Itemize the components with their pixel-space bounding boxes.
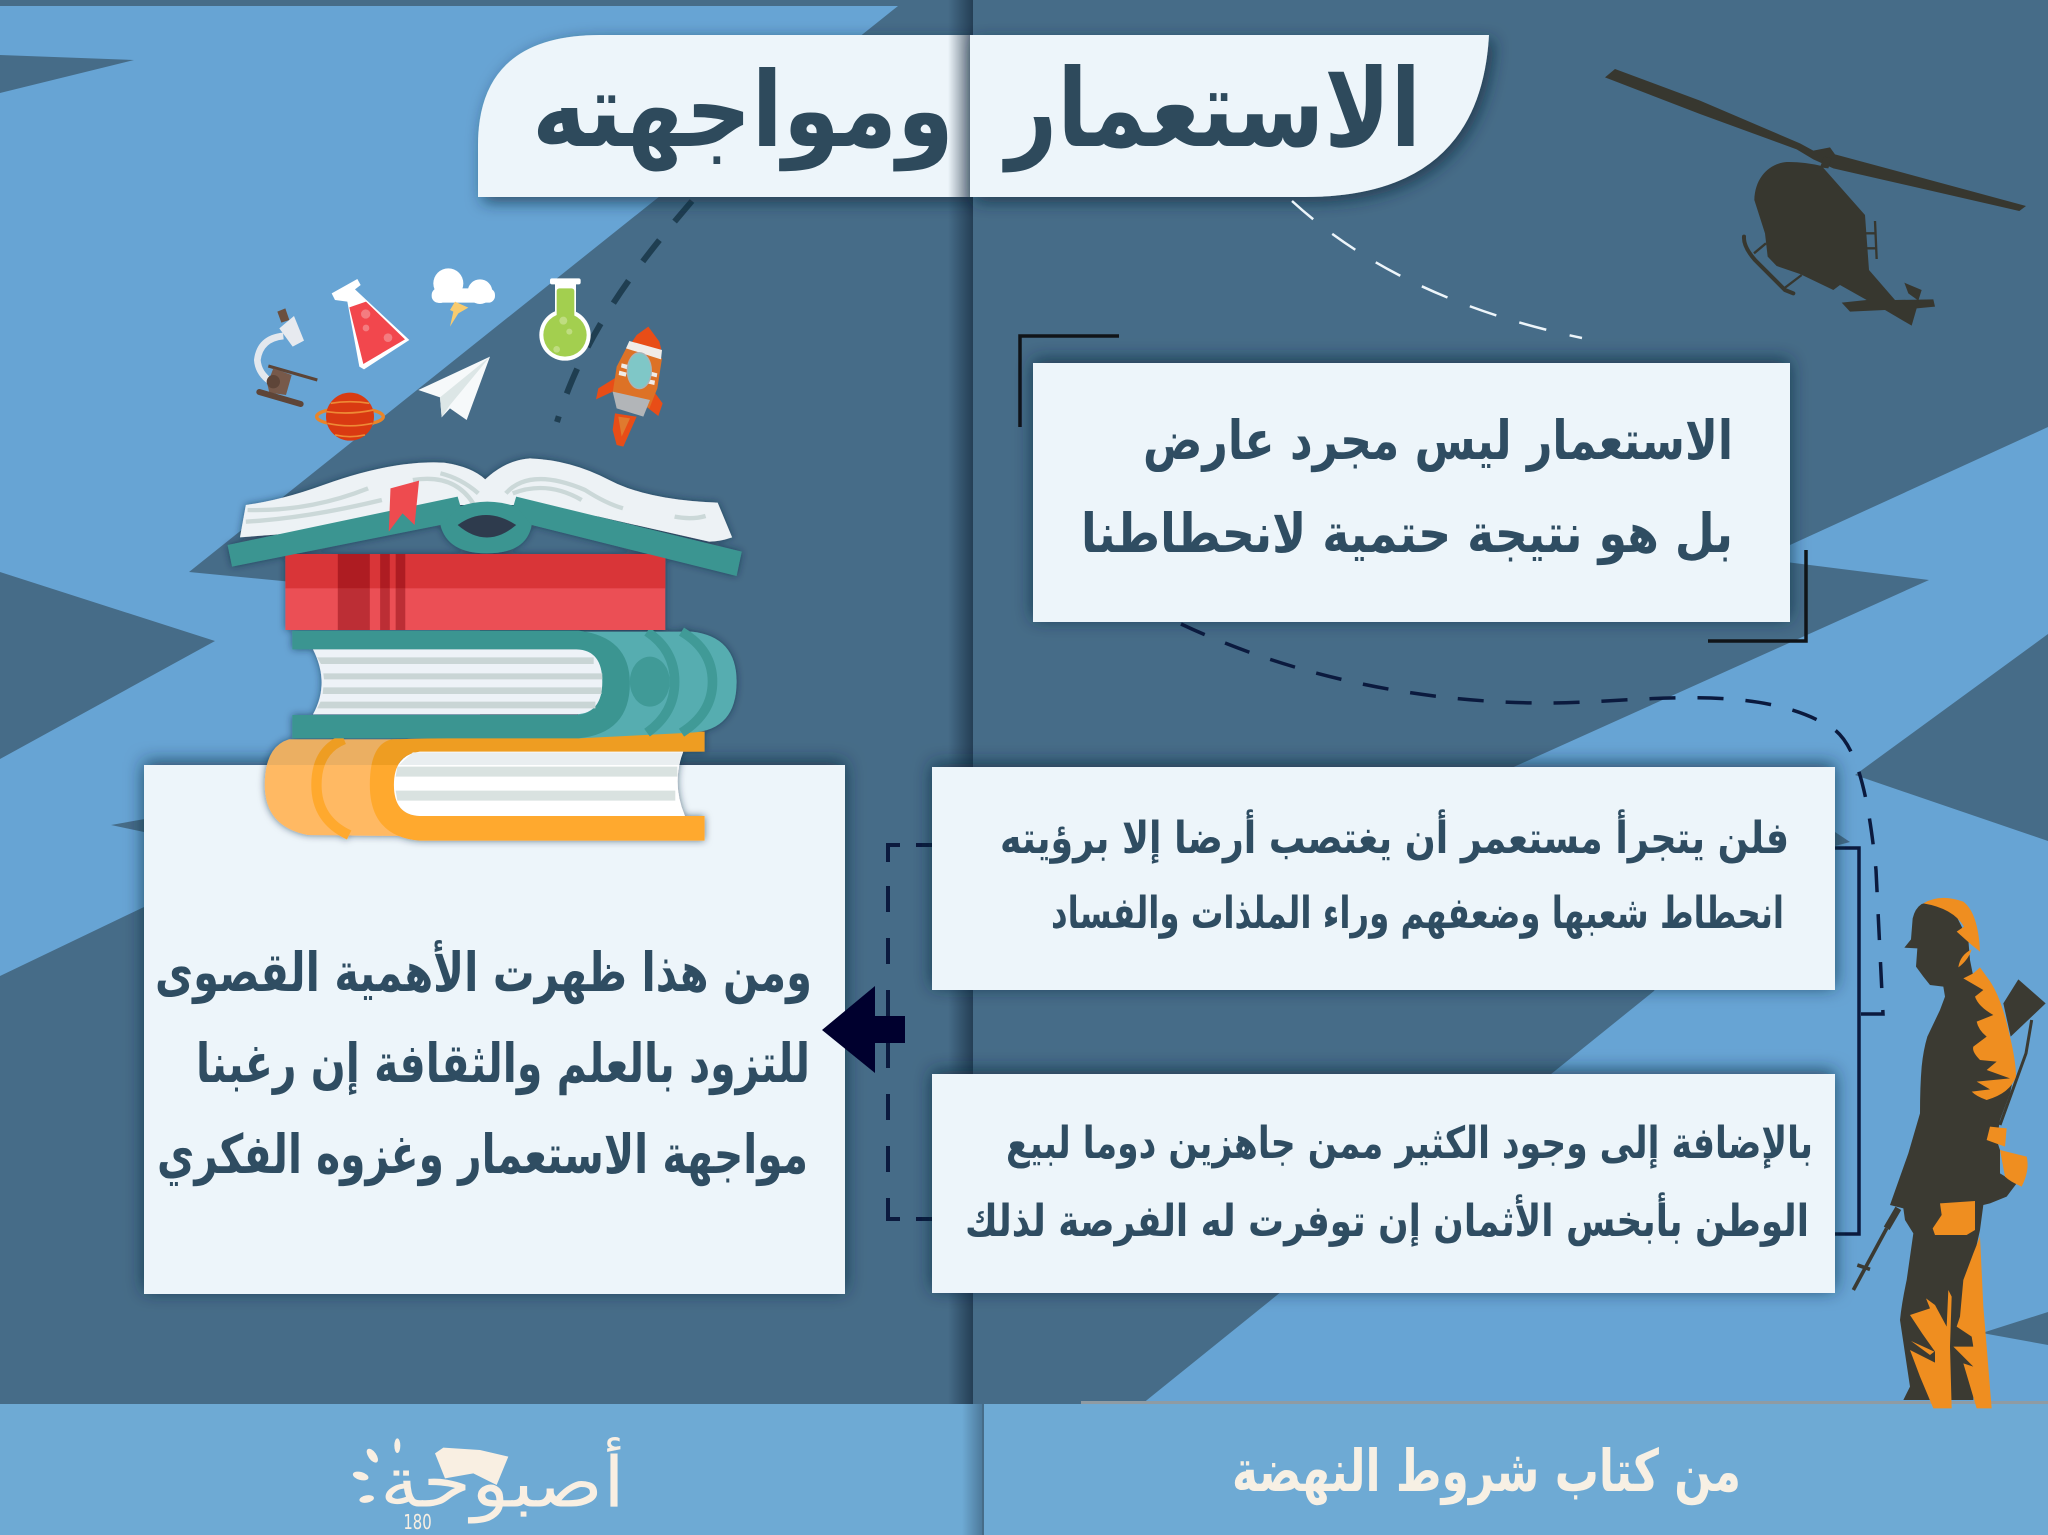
dashed line from title to science icons xyxy=(557,201,692,422)
book stack xyxy=(228,458,742,841)
text: second statement: انحطاط شعبها وضعفهم وراء الملذات والفساد xyxy=(1051,888,1784,939)
text: conclusion: ومن هذا ظهرت الأهمية القصوى xyxy=(155,940,812,1004)
text: conclusion: للتزود بالعلم والثقافة إن رغبنا xyxy=(196,1032,810,1095)
right page: dark panel with shadow on the fold xyxy=(948,0,2048,1404)
footer: left xyxy=(0,1404,982,1535)
panel: colonialism statement xyxy=(1020,336,1806,641)
logo number: 180 xyxy=(403,1510,432,1534)
icon: paper plane xyxy=(418,357,490,420)
icon: rocket xyxy=(596,327,663,447)
title banner: right part xyxy=(970,35,1489,197)
title word: ومواجهته: ومواجهته xyxy=(532,49,954,172)
red book xyxy=(285,554,665,630)
corner bracket: top left xyxy=(1020,336,1119,427)
icon: red flask xyxy=(332,279,409,369)
soldier body xyxy=(1890,901,2017,1400)
footer logo: Osbouha 180 xyxy=(352,1437,625,1534)
title word: الاستعمار: الاستعمار xyxy=(1002,47,1421,172)
soldier silhouette xyxy=(1853,898,2046,1408)
logo open book xyxy=(435,1448,508,1485)
background: left light blue shapes xyxy=(0,6,898,976)
text: third statement: بالإضافة إلى وجود الكثير ممن جاهزين دوما لبيع xyxy=(1006,1118,1813,1169)
white dashed connector from title xyxy=(1292,201,1582,338)
arrow pointing to conclusion xyxy=(822,986,905,1073)
navy dashed connector xyxy=(1181,624,1883,1014)
panel: third statement xyxy=(932,1074,1835,1293)
title banner: left part xyxy=(478,35,985,197)
navy bracket joining right panels xyxy=(1835,848,1859,1234)
background: right light blue shapes xyxy=(1142,427,2048,1404)
panel: second statement xyxy=(932,767,1835,990)
panel background xyxy=(1033,363,1790,622)
icon: green flask xyxy=(539,278,591,361)
text: second statement: فلن يتجرأ مستعمر أن يغتصب أرضا إلا برؤيته xyxy=(1000,809,1789,864)
text: first statement: بل هو نتيجة حتمية لانحطاطنا xyxy=(1081,502,1733,565)
icons: science and knowledge xyxy=(257,268,663,447)
text: conclusion xyxy=(155,940,812,1186)
text: third statement xyxy=(965,1118,1813,1247)
icon: planet xyxy=(317,393,383,441)
icon: storm cloud xyxy=(432,268,495,327)
panel: conclusion xyxy=(144,765,845,1294)
icon: helicopter silhouette xyxy=(1605,69,2026,326)
text: first statement xyxy=(1081,409,1733,565)
orange highlights xyxy=(1910,898,2028,1408)
text: conclusion: مواجهة الاستعمار وغزوه الفكري xyxy=(157,1123,808,1186)
footer: right xyxy=(984,1401,2048,1535)
dashed bracket joining panels to arrow xyxy=(888,845,932,1219)
teal book xyxy=(292,631,737,738)
corner bracket: bottom right xyxy=(1708,550,1806,641)
text: second statement xyxy=(1000,809,1789,939)
orange book xyxy=(265,732,705,841)
icon: microscope xyxy=(257,308,317,404)
text: third statement: الوطن بأبخس الأثمان إن توفرت له الفرصة لذلك xyxy=(965,1192,1809,1247)
logo sun rays xyxy=(352,1438,400,1504)
rifle stock and sling xyxy=(1853,979,2046,1290)
source text: من كتاب شروط النهضة xyxy=(1232,1437,1741,1506)
open book xyxy=(228,458,742,576)
logo wordmark: أصبوحة xyxy=(380,1437,625,1524)
text: first statement: الاستعمار ليس مجرد عارض xyxy=(1143,409,1733,473)
